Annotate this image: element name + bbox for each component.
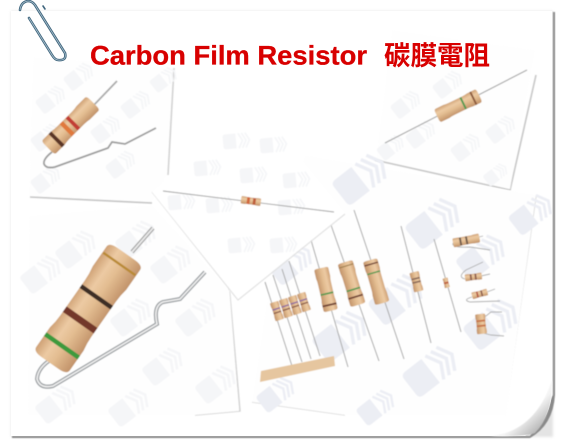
page curl corner bbox=[490, 380, 552, 436]
title: 碳膜電阻 bbox=[384, 41, 490, 71]
resistor body bbox=[41, 96, 100, 155]
large watermarks bbox=[255, 150, 556, 427]
formed-lead resistors bbox=[453, 236, 504, 336]
lead wires bbox=[265, 210, 461, 367]
icon: paper clip bbox=[20, 1, 65, 60]
photo: tiny resistor on diamond card bbox=[152, 105, 345, 300]
title bbox=[90, 40, 490, 71]
large axial resistors bbox=[314, 266, 338, 312]
paper tape strip bbox=[260, 356, 335, 382]
title: Carbon Film Resistor bbox=[90, 40, 367, 70]
resistor body bbox=[240, 196, 261, 206]
photo: axial resistor top right bbox=[375, 30, 536, 190]
photo: large resistor bottom left bbox=[19, 205, 240, 428]
resistor body bbox=[33, 242, 143, 375]
photo: bent-lead resistor top left bbox=[29, 57, 179, 203]
resistor body bbox=[434, 89, 482, 122]
small axial resistors bbox=[409, 271, 423, 293]
photo: resistor assortment bottom right bbox=[252, 150, 556, 427]
